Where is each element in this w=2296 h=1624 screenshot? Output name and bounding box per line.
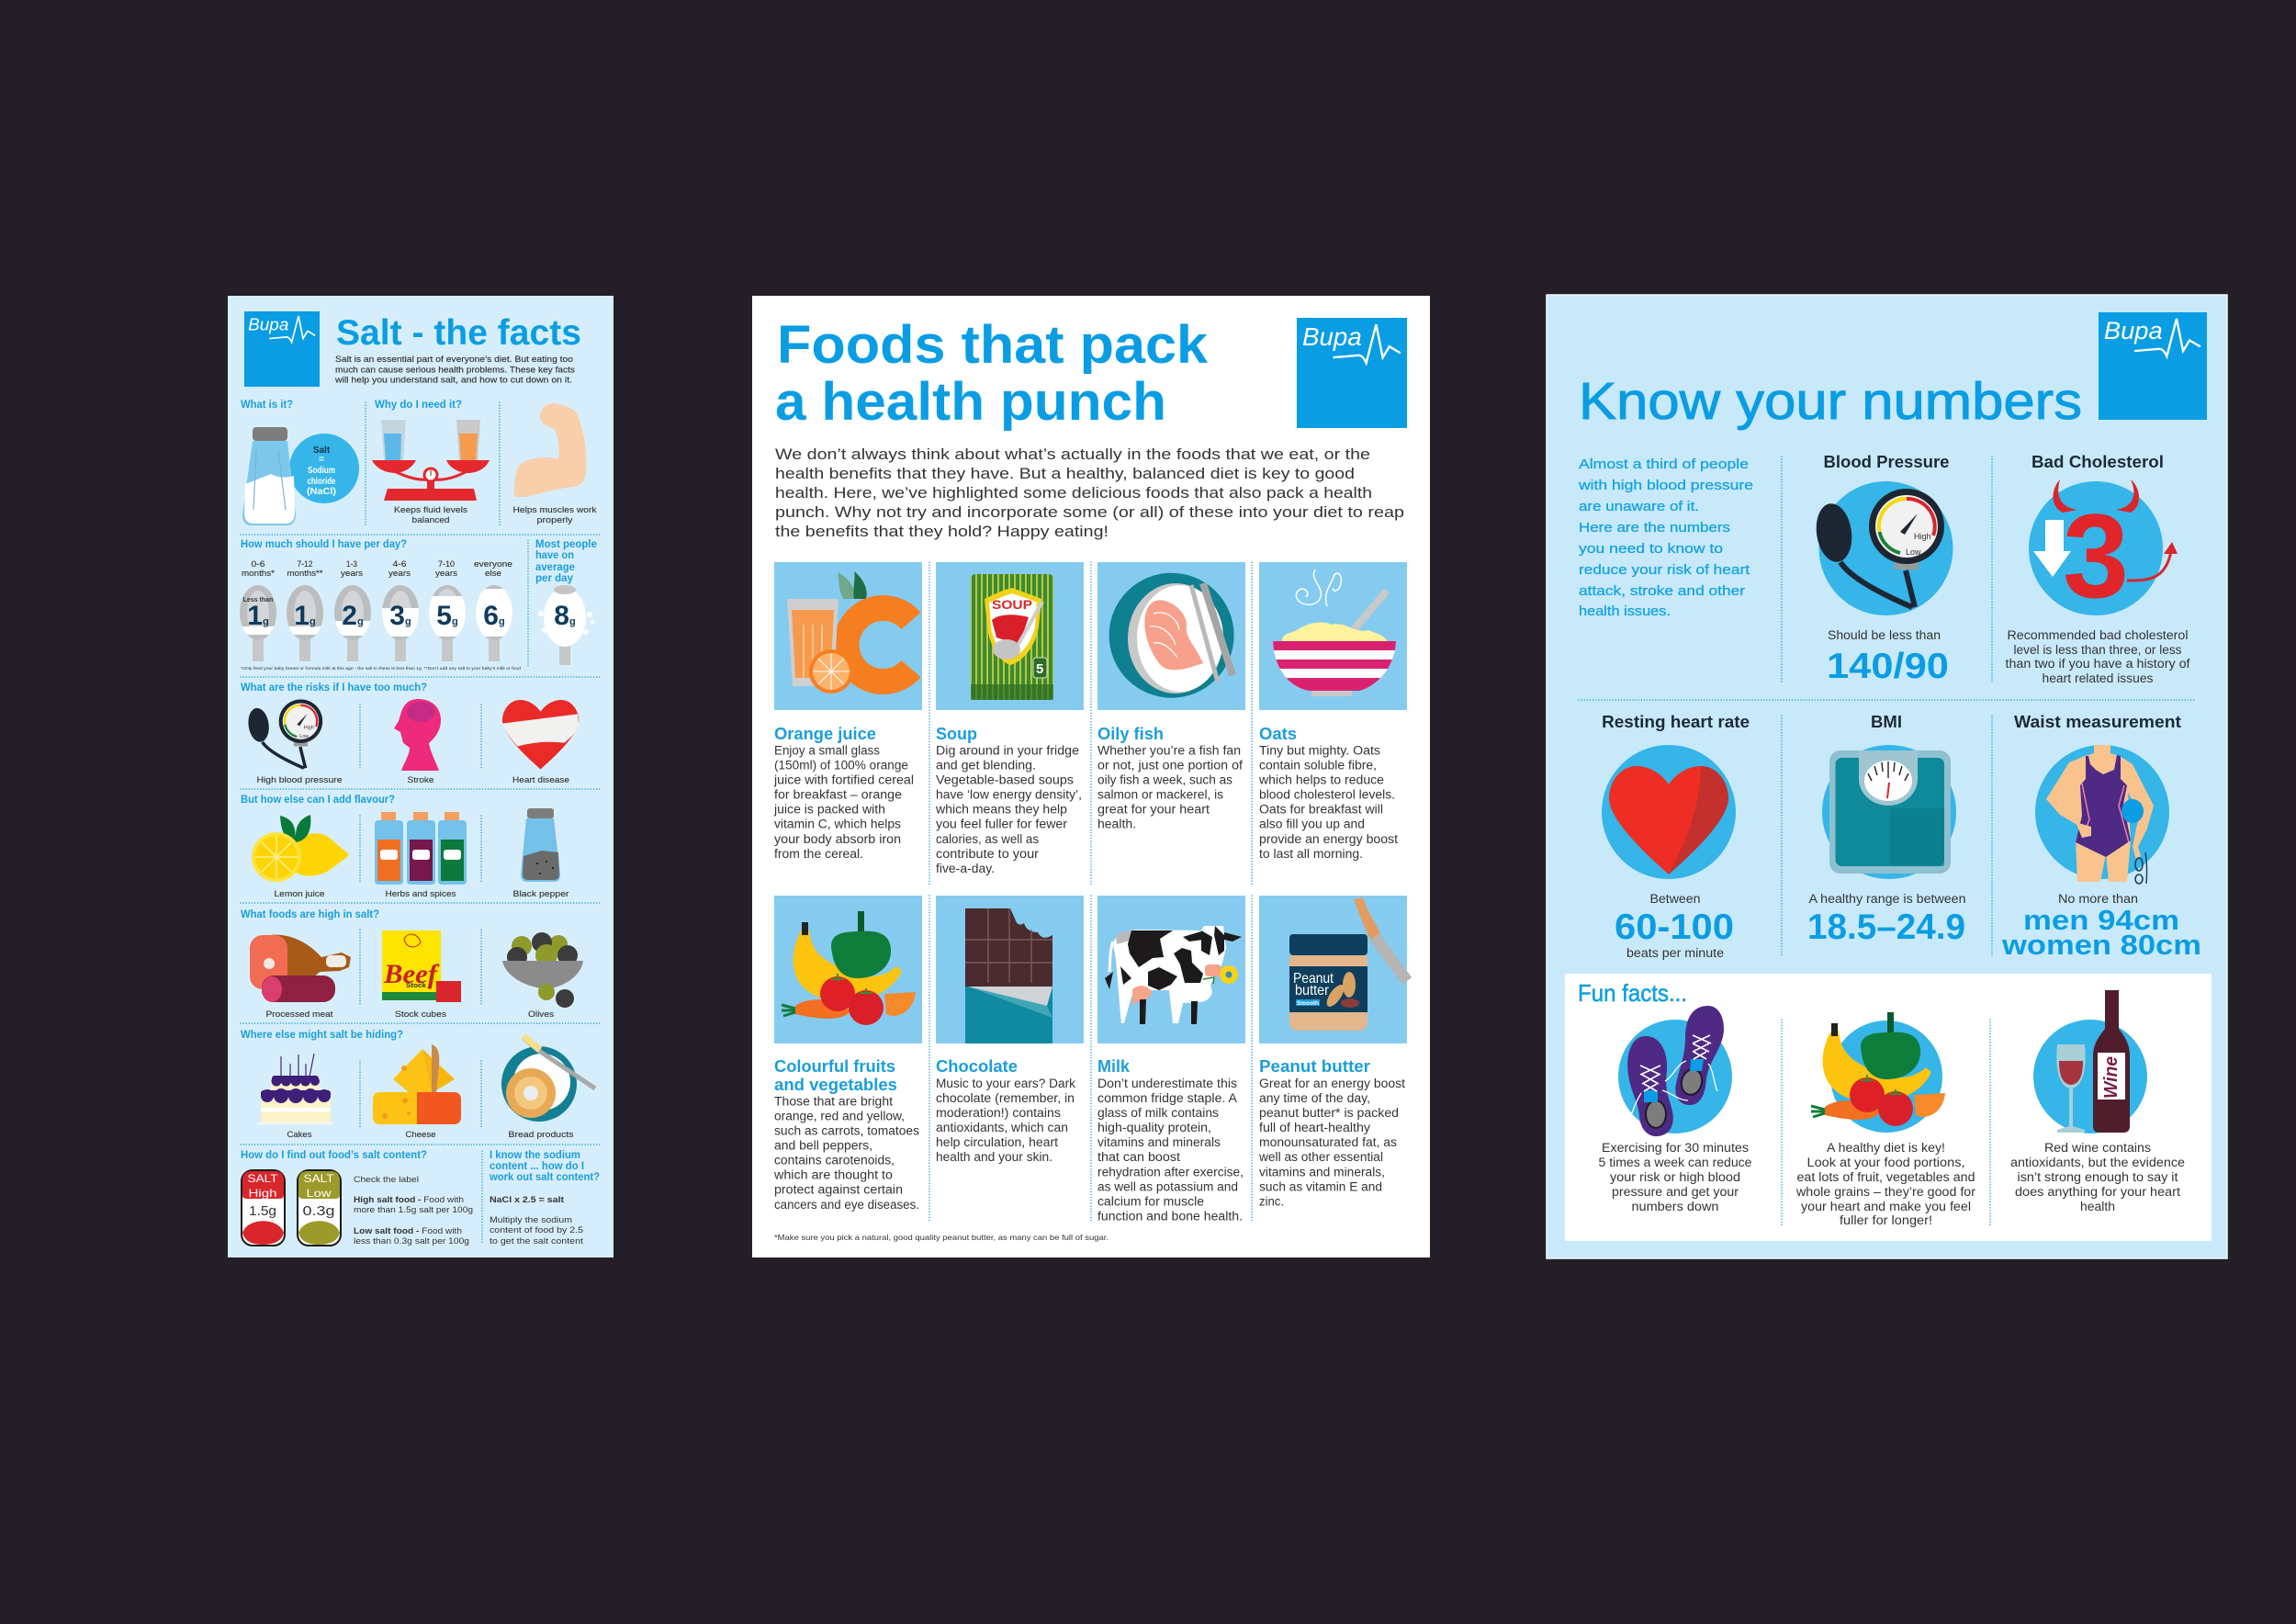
icon: swimmer [2035, 745, 2169, 884]
intro text: reduce your risk of heart [1579, 562, 1750, 578]
text: diet fact: fuller for longer! [1840, 1213, 1932, 1227]
food text: chocolate: Music to your ears? Dark [936, 1077, 1075, 1090]
icon: processed meat [250, 935, 351, 1002]
food text: colourful fruits: and bell peppers, [774, 1139, 872, 1152]
heading: risks: What are the risks if I have too much? [241, 682, 427, 694]
food text: peanut butter: well as other essential [1258, 1150, 1383, 1164]
text: label guidance: more than 1.5g salt per 100g [354, 1205, 473, 1215]
heading: most people: have on [535, 550, 574, 561]
food text: milk: rehydration after exercise, [1097, 1166, 1244, 1179]
food text: orange juice [773, 725, 914, 861]
text: waist target: men 94cm [2023, 904, 2179, 936]
icon: beef stock box: Stock [406, 981, 427, 989]
food text: colourful fruits: Those that are bright [774, 1094, 893, 1108]
spoon: less than 1g: Less than [243, 597, 273, 603]
food text: colourful fruits: such as carrots, tomatoes [774, 1124, 919, 1137]
food text: chocolate [936, 1057, 1075, 1164]
label: salt high: SALT [248, 1172, 278, 1185]
spoon: less than 1g [240, 585, 276, 661]
food text: soup: five-a-day. [936, 862, 995, 875]
heading: most people: per day [535, 573, 574, 584]
icon: beef stock box: Beef [383, 959, 440, 989]
icon: red wine: Wine [2101, 1056, 2122, 1099]
food text: oily fish: oily fish a week, such as [1097, 773, 1232, 786]
food text: orange juice: for breakfast – orange [774, 788, 902, 801]
text: diet fact: your heart and make you feel [1801, 1200, 1971, 1213]
food text: peanut butter: any time of the day, [1259, 1091, 1370, 1105]
text: BMI target: 18.5–24.9 [1807, 908, 1965, 947]
age labels [242, 559, 512, 579]
food text: soup: which means they help [935, 803, 1067, 817]
text: waist target [2001, 892, 2201, 961]
text: label guidance: less than 0.3g salt per 100g [354, 1236, 469, 1246]
heading: waist measurement: Waist measurement [2014, 713, 2181, 731]
age labels: years [341, 569, 363, 579]
food text: oily fish: Oily fish [1097, 725, 1164, 743]
intro text: with high blood pressure [1578, 478, 1753, 493]
heading: Why do I need it?: Why do I need it? [375, 400, 462, 411]
spoon: 3g [382, 585, 419, 661]
heading: flavour: But how else can I add flavour? [241, 795, 395, 806]
heading: hiding: Where else might salt be hiding? [241, 1030, 403, 1041]
food text: soup: Vegetable-based soups [936, 773, 1074, 786]
icon: bandaged heart [502, 700, 579, 770]
image: chocolate [936, 896, 1084, 1043]
text: heart rate target: 60-100 [1615, 908, 1734, 947]
caption: lemon juice: Lemon juice [274, 889, 325, 899]
spoon: 3g: 3g [389, 601, 411, 631]
title: Know your numbers [1579, 372, 2082, 431]
spoon: 5g: 5g [436, 601, 458, 631]
text: blood pressure target [1827, 628, 1949, 686]
text: sodium formula: NaCl x 2.5 = salt [490, 1195, 565, 1205]
food text: colourful fruits: protect against certain [774, 1183, 903, 1197]
heading: how much: How much should I have per day? [241, 539, 407, 550]
spoon: 6g [476, 585, 512, 661]
text: wine fact: Red wine contains [2044, 1141, 2151, 1155]
panel: fun facts [1565, 974, 2212, 1241]
heading: BMI: BMI [1871, 713, 1902, 731]
age labels: months** [287, 569, 323, 579]
text: BMI target: A healthy range is between [1809, 892, 1965, 906]
caption: herbs and spices: Herbs and spices [386, 889, 456, 899]
title [775, 315, 1209, 432]
caption: cakes: Cakes [287, 1130, 312, 1140]
caption: fluid levels: balanced [411, 515, 450, 525]
icon: heart [1602, 745, 1736, 879]
text: heart rate target: Between [1649, 892, 1701, 906]
image: peanut butter: Smooth [1297, 1000, 1319, 1007]
heading: What is it?: What is it? [241, 400, 293, 411]
food text: milk: function and bone health. [1097, 1209, 1243, 1223]
text: sodium formula: to get the salt content [490, 1236, 583, 1246]
food text: oats: blood cholesterol levels. [1259, 788, 1395, 801]
icon: red wine [2033, 990, 2147, 1133]
text: cholesterol target: Recommended bad cholesterol [2008, 628, 2188, 642]
food text: peanut butter: peanut butter* is packed [1259, 1106, 1399, 1120]
food text: oily fish [1097, 725, 1243, 831]
spoon: 8g heaped [538, 585, 594, 665]
food text: orange juice: your body absorb iron [774, 832, 901, 846]
icon: devil number 3: 3 [2063, 489, 2129, 623]
footnote: *Only feed your baby breast or formula milk at this age - the salt in these is less than 1g. **Don’t add any salt to your baby’s milk or food [241, 666, 521, 671]
text: sodium formula [490, 1195, 583, 1246]
icon: beef stock box [382, 930, 461, 1002]
food text: soup [935, 725, 1082, 875]
icon: salt circle: chloride [307, 477, 336, 487]
caption: olives: Olives [528, 1009, 554, 1020]
food text: peanut butter: Great for an energy boost [1259, 1077, 1405, 1090]
caption: black pepper: Black pepper [512, 889, 569, 899]
icon: fruit and vegetables [1811, 1012, 1945, 1133]
panel: Know your numbers [1547, 295, 2227, 1258]
caption: cheese: Cheese [406, 1130, 435, 1140]
heading: sodium: I know the sodium [490, 1150, 580, 1161]
heading: sodium: work out salt content? [489, 1172, 600, 1183]
food text: oats: also fill you up and [1259, 818, 1365, 831]
image: orange juice [774, 562, 922, 710]
text: sodium formula: Multiply the sodium [490, 1215, 572, 1225]
intro text: punch. Why not try and incorporate some (or all) of these into your diet to reap [775, 503, 1404, 521]
caption: processed meat: Processed meat [266, 1009, 333, 1020]
icon: bread on plate [501, 1036, 595, 1122]
text: diet fact: Look at your food portions, [1807, 1156, 1965, 1169]
title: Salt - the facts [336, 313, 581, 353]
intro text [1578, 457, 1753, 619]
logo: Bupa [1297, 318, 1407, 428]
heading: most people [535, 539, 597, 584]
text: cholesterol target: heart related issues [2043, 671, 2154, 685]
icon: blood pressure monitor: High [304, 725, 314, 730]
text: label guidance: Low salt food - Food with [354, 1226, 462, 1236]
food text: soup: contribute to your [936, 847, 1040, 861]
intro text: health benefits that they have. But a healthy, balanced diet is key to good [775, 465, 1355, 482]
image: peanut butter: Peanut [1293, 971, 1334, 987]
caption: stroke: Stroke [408, 775, 433, 785]
label: salt high: High [248, 1187, 277, 1200]
food text: chocolate: health and your skin. [936, 1150, 1052, 1164]
text: exercise fact: your risk or high blood [1610, 1170, 1740, 1184]
food text: milk: that can boost [1097, 1150, 1180, 1164]
text: sodium formula: content of food by 2.5 [490, 1225, 583, 1235]
text: cholesterol target [2006, 628, 2190, 685]
intro text [775, 445, 1404, 540]
icon: salt circle: (NaCl) [307, 487, 336, 497]
logo: Bupa: Bupa [248, 315, 288, 334]
spoon: less than 1g: 1g [247, 601, 269, 631]
text: label guidance [354, 1175, 473, 1246]
label: salt low: 0.3g [303, 1203, 334, 1219]
heading: foods high in salt: What foods are high in salt? [241, 909, 379, 920]
food text: peanut butter: monounsaturated fat, as [1259, 1135, 1397, 1149]
heading: most people: average [535, 562, 575, 573]
icon: blood pressure monitor [1813, 481, 1953, 615]
intro text: Here are the numbers [1579, 520, 1730, 536]
icon: balance scales [372, 420, 490, 501]
text: diet fact: whole grains – they’re good for [1795, 1185, 1976, 1199]
caption: high blood pressure: High blood pressure [257, 775, 342, 785]
intro text: health issues. [1579, 603, 1671, 619]
text: exercise fact: pressure and get your [1612, 1185, 1739, 1199]
age labels: 1-3 [346, 559, 357, 570]
food text: colourful fruits: Colourful fruits [774, 1057, 895, 1076]
icon: lemon [252, 815, 349, 882]
icon: salt circle [289, 434, 359, 503]
food text: soup: you feel fuller for fewer [936, 818, 1068, 831]
food text: oats: Oats [1259, 725, 1297, 743]
text: waist target: women 80cm [2001, 929, 2201, 961]
food text: oily fish: great for your heart [1097, 803, 1210, 817]
spoon: 6g: 6g [483, 601, 505, 631]
icon: olives bowl [502, 932, 583, 1008]
icon: flexed arm [514, 403, 586, 497]
text: wine fact: antioxidants, but the evidence [2010, 1156, 2185, 1169]
food text: milk: glass of milk contains [1097, 1106, 1219, 1120]
food text: peanut butter: vitamins and minerals, [1259, 1166, 1385, 1179]
food text: milk: vitamins and minerals [1097, 1135, 1221, 1149]
intro text: attack, stroke and other [1579, 583, 1745, 599]
food text: oats: contain soluble fibre, [1259, 758, 1377, 772]
icon: blood pressure monitor: Low [299, 734, 309, 739]
caption: muscles: properly [536, 515, 573, 525]
food text: oily fish: Whether you’re a fish fan [1097, 743, 1241, 757]
spoon: 8g heaped: 8g [554, 601, 576, 631]
food text: peanut butter: zinc. [1259, 1194, 1284, 1208]
intro text: are unaware of it. [1579, 499, 1699, 514]
logo: Bupa: Bupa [1302, 322, 1362, 351]
food text: milk: common fridge staple. A [1097, 1091, 1237, 1105]
food text: oily fish: health. [1097, 818, 1136, 831]
logo: Bupa: Bupa [2104, 317, 2163, 344]
text: blood pressure target: 140/90 [1827, 647, 1949, 686]
food text: colourful fruits: which are thought to [773, 1168, 893, 1182]
intro text: you need to know to [1579, 541, 1723, 557]
intro text: Salt is an essential part of everyone’s diet. But eating too [335, 355, 573, 365]
intro text: much can cause serious health problems. These key facts [335, 366, 575, 375]
label: salt low: SALT [303, 1172, 334, 1185]
spoon: 1g: 1g [294, 601, 316, 631]
food text: soup: calories, as well as [936, 832, 1039, 846]
age labels: everyone [474, 559, 512, 570]
heading: salt content: How do I find out food’s salt content? [241, 1150, 427, 1161]
food text: orange juice: Orange juice [774, 725, 876, 743]
caption: muscles [512, 505, 597, 525]
logo: Bupa [2099, 312, 2207, 420]
food text: oats: to last all morning. [1259, 847, 1363, 861]
food text: colourful fruits: orange, red and yellow, [774, 1109, 905, 1122]
label: salt high: 1.5g [249, 1203, 276, 1219]
age labels: else [485, 569, 501, 579]
logo: Bupa [244, 311, 320, 387]
food text: oily fish: salmon or mackerel, is [1097, 788, 1223, 801]
food text: chocolate: antioxidants, which can [936, 1121, 1068, 1134]
food text: colourful fruits [773, 1057, 919, 1212]
heading: bad cholesterol: Bad Cholesterol [2032, 453, 2164, 471]
food text: orange juice: Enjoy a small glass [774, 743, 880, 757]
text: label guidance: High salt food - Food with [354, 1195, 464, 1205]
image: soup [936, 562, 1084, 710]
food text: peanut butter: full of heart-healthy [1259, 1121, 1370, 1134]
text: exercise fact: Exercising for 30 minutes [1602, 1141, 1749, 1155]
icon: cake [257, 1054, 333, 1124]
text: wine fact [2010, 1141, 2185, 1213]
food text: milk: Don’t underestimate this [1097, 1077, 1237, 1090]
spoon: 2g: 2g [342, 601, 364, 631]
food text: chocolate: chocolate (remember, in [936, 1091, 1075, 1105]
icon: blood pressure monitor: High [1914, 532, 1931, 541]
food text: oats [1258, 725, 1398, 861]
food text: soup: have ‘low energy density’, [936, 788, 1082, 801]
intro text: health. Here, we’ve highlighted some delicious foods that also pack a health [775, 484, 1372, 502]
icon: salt circle: Salt [313, 445, 331, 456]
caption: fluid levels [394, 505, 467, 525]
food text: colourful fruits: and vegetables [774, 1076, 897, 1094]
icon: stroke head [394, 699, 441, 771]
caption: muscles: Helps muscles work [512, 505, 597, 515]
food text: orange juice: (150ml) of 100% orange [774, 758, 908, 772]
text: wine fact: isn’t strong enough to say it [2017, 1170, 2178, 1184]
image: milk cow [1097, 896, 1245, 1043]
panel: Salt - the facts [228, 296, 613, 1257]
food text: peanut butter: Peanut butter [1259, 1057, 1370, 1076]
food text: oats: Oats for breakfast will [1259, 803, 1383, 817]
text: blood pressure target: Should be less than [1828, 628, 1941, 642]
text: heart rate target: beats per minute [1626, 946, 1724, 960]
image: peanut butter: butter [1295, 983, 1330, 998]
title: Foods that pack [777, 315, 1209, 375]
spoon: 5g [429, 585, 466, 661]
intro text [334, 355, 575, 386]
age labels: years [435, 569, 457, 579]
icon: blood pressure monitor [246, 699, 322, 768]
heading: sodium: content ... how do I [490, 1161, 584, 1172]
text: label guidance: Check the label [354, 1175, 419, 1185]
food text: peanut butter [1258, 1057, 1405, 1208]
panel: Foods that pack a health punch [752, 296, 1430, 1257]
text: cholesterol target: level is less than three, or less [2013, 643, 2182, 657]
age labels: 4-6 [393, 559, 406, 570]
heading: sodium [489, 1150, 600, 1183]
text: diet fact: eat lots of fruit, vegetables and [1796, 1170, 1975, 1184]
age labels: 7-10 [438, 559, 455, 570]
label: salt low [298, 1170, 341, 1246]
text: cholesterol target: than two if you have a history of [2006, 657, 2190, 671]
food text: milk: calcium for muscle [1097, 1194, 1204, 1208]
food text: milk [1097, 1057, 1244, 1223]
icon: bathroom scale [1822, 745, 1956, 879]
food text: oats: which helps to reduce [1258, 773, 1384, 786]
text: diet fact [1795, 1141, 1976, 1227]
text: wine fact: health [2080, 1200, 2115, 1213]
food text: orange juice: from the cereal. [774, 847, 863, 861]
image: colourful fruits and vegetables [774, 896, 922, 1043]
intro text: will help you understand salt, and how to cut down on it. [334, 375, 572, 386]
spoon: 2g [334, 585, 371, 661]
food text: peanut butter: such as vitamin E and [1259, 1179, 1382, 1193]
label: salt high [242, 1170, 285, 1246]
food text: colourful fruits: cancers and eye diseases. [774, 1198, 919, 1212]
intro text: the benefits that they hold? Happy eating! [775, 523, 1109, 540]
image: oily fish [1097, 562, 1245, 710]
caption: heart disease: Heart disease [512, 775, 569, 785]
text: exercise fact [1598, 1141, 1752, 1213]
caption: bread products: Bread products [509, 1130, 574, 1140]
text: heart rate target [1615, 892, 1734, 960]
title: a health punch [775, 372, 1166, 432]
text: exercise fact: numbers down [1631, 1200, 1719, 1213]
caption: fluid levels: Keeps fluid levels [394, 505, 467, 515]
image: oats [1259, 562, 1407, 710]
icon: salt shaker [242, 427, 296, 525]
food text: orange juice: juice with fortified cereal [773, 773, 914, 786]
food text: chocolate: Chocolate [936, 1057, 1018, 1076]
food text: chocolate: moderation!) contains [936, 1106, 1061, 1120]
food text: soup: and get blending. [936, 758, 1036, 772]
heading: fun facts: Fun facts... [1578, 979, 1687, 1007]
food text: orange juice: juice is packed with [773, 803, 885, 817]
image: soup: 5 [1036, 661, 1043, 677]
intro text: We don’t always think about what’s actually in the foods that we eat, or the [775, 445, 1370, 463]
icon: salt circle: Sodium [308, 466, 335, 476]
heading: blood pressure: Blood Pressure [1824, 453, 1949, 471]
footnote: *Make sure you pick a natural, good quality peanut butter, as many can be full of sugar. [774, 1233, 1109, 1242]
icon: running shoes [1618, 1006, 1732, 1136]
spoon: 1g [287, 585, 323, 661]
icon: salt circle: = [319, 455, 324, 465]
food text: chocolate: help circulation, heart [936, 1135, 1058, 1149]
food text: colourful fruits: contains carotenoids, [774, 1154, 895, 1167]
food text: orange juice: vitamin C, which helps [774, 818, 901, 831]
age labels: 0-6 [252, 559, 264, 570]
text: waist target: No more than [2058, 892, 2138, 906]
food text: soup: Soup [936, 725, 977, 743]
image: soup: SOUP [992, 597, 1032, 612]
icon: pepper shaker [521, 808, 560, 882]
age labels: 7-12 [298, 559, 312, 570]
text: diet fact: A healthy diet is key! [1827, 1141, 1945, 1155]
text: exercise fact: 5 times a week can reduce [1598, 1156, 1752, 1169]
icon: blood pressure monitor: Low [1906, 547, 1921, 557]
food text: milk: high-quality protein, [1097, 1121, 1211, 1134]
text: wine fact: does anything for your heart [2015, 1185, 2180, 1199]
food text: soup: Dig around in your fridge [936, 743, 1079, 757]
caption: stock cubes: Stock cubes [395, 1009, 446, 1020]
intro text: Almost a third of people [1579, 457, 1749, 472]
age labels: years [388, 569, 411, 579]
food text: milk: Milk [1097, 1057, 1131, 1076]
food text: oats: Tiny but mighty. Oats [1259, 743, 1380, 757]
food text: oily fish: or not, just one portion of [1097, 758, 1243, 772]
icon: herb and spice bottles [375, 812, 467, 885]
food text: milk: as well as potassium and [1097, 1179, 1238, 1193]
icon: devil number 3 [2029, 479, 2178, 623]
image: peanut butter [1259, 896, 1407, 1043]
heading: most people: Most people [535, 539, 597, 550]
label: salt low: Low [307, 1187, 332, 1200]
age labels: months* [242, 569, 275, 579]
food text: oats: provide an energy boost [1259, 832, 1398, 846]
icon: cheese [373, 1044, 461, 1124]
heading: resting heart rate: Resting heart rate [1602, 713, 1750, 731]
